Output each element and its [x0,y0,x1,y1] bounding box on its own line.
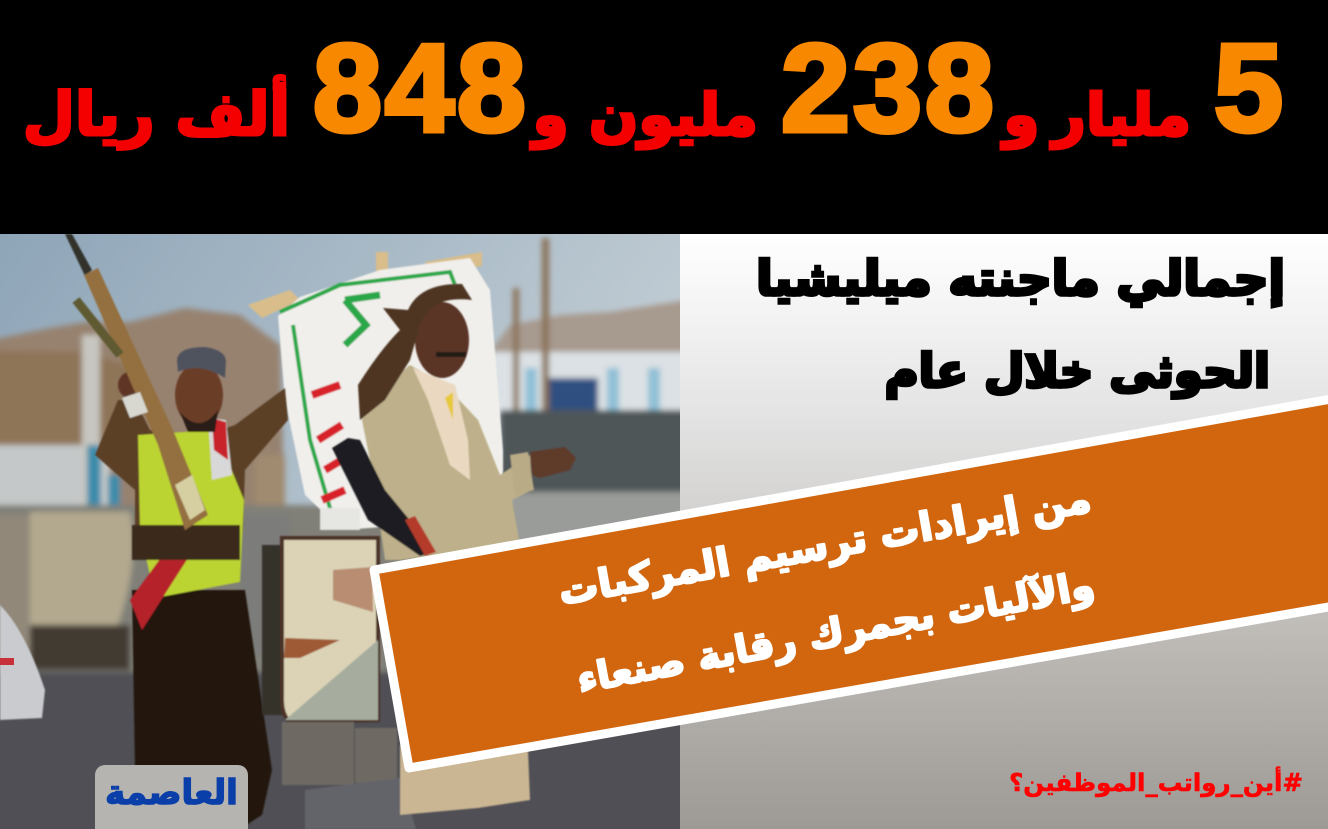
right background panel [680,234,1328,829]
callout [370,395,1328,772]
heading line 1: إجمالي ماجنته ميليشيا [756,251,1285,307]
crate with posters [262,538,416,829]
hashtag: #أين_رواتب_الموظفين؟ [1009,768,1303,797]
title banner [0,0,1328,234]
callout line 2: والآليات بجمرك رقابة صنعاء [574,563,1098,703]
right man [332,284,576,815]
heading line 2: الحوثى خلال عام [885,344,1270,398]
logo text: العاصمة [105,773,238,813]
rifle [65,234,92,276]
callout line 1: من إيرادات ترسيم المركبات [555,476,1094,615]
flag banner [248,252,503,530]
car [0,605,45,720]
number: 238: 238 [781,20,997,158]
label: thousand riyal: ألف ريال [23,80,290,150]
number: 848: 848 [313,20,529,158]
logo [95,765,248,829]
number: 5: 5 [1214,20,1286,158]
label: billion: مليار و [1003,81,1191,149]
photo: armed men at a checkpoint [0,234,680,829]
left man [65,234,288,829]
label: million: مليون و [533,81,758,149]
